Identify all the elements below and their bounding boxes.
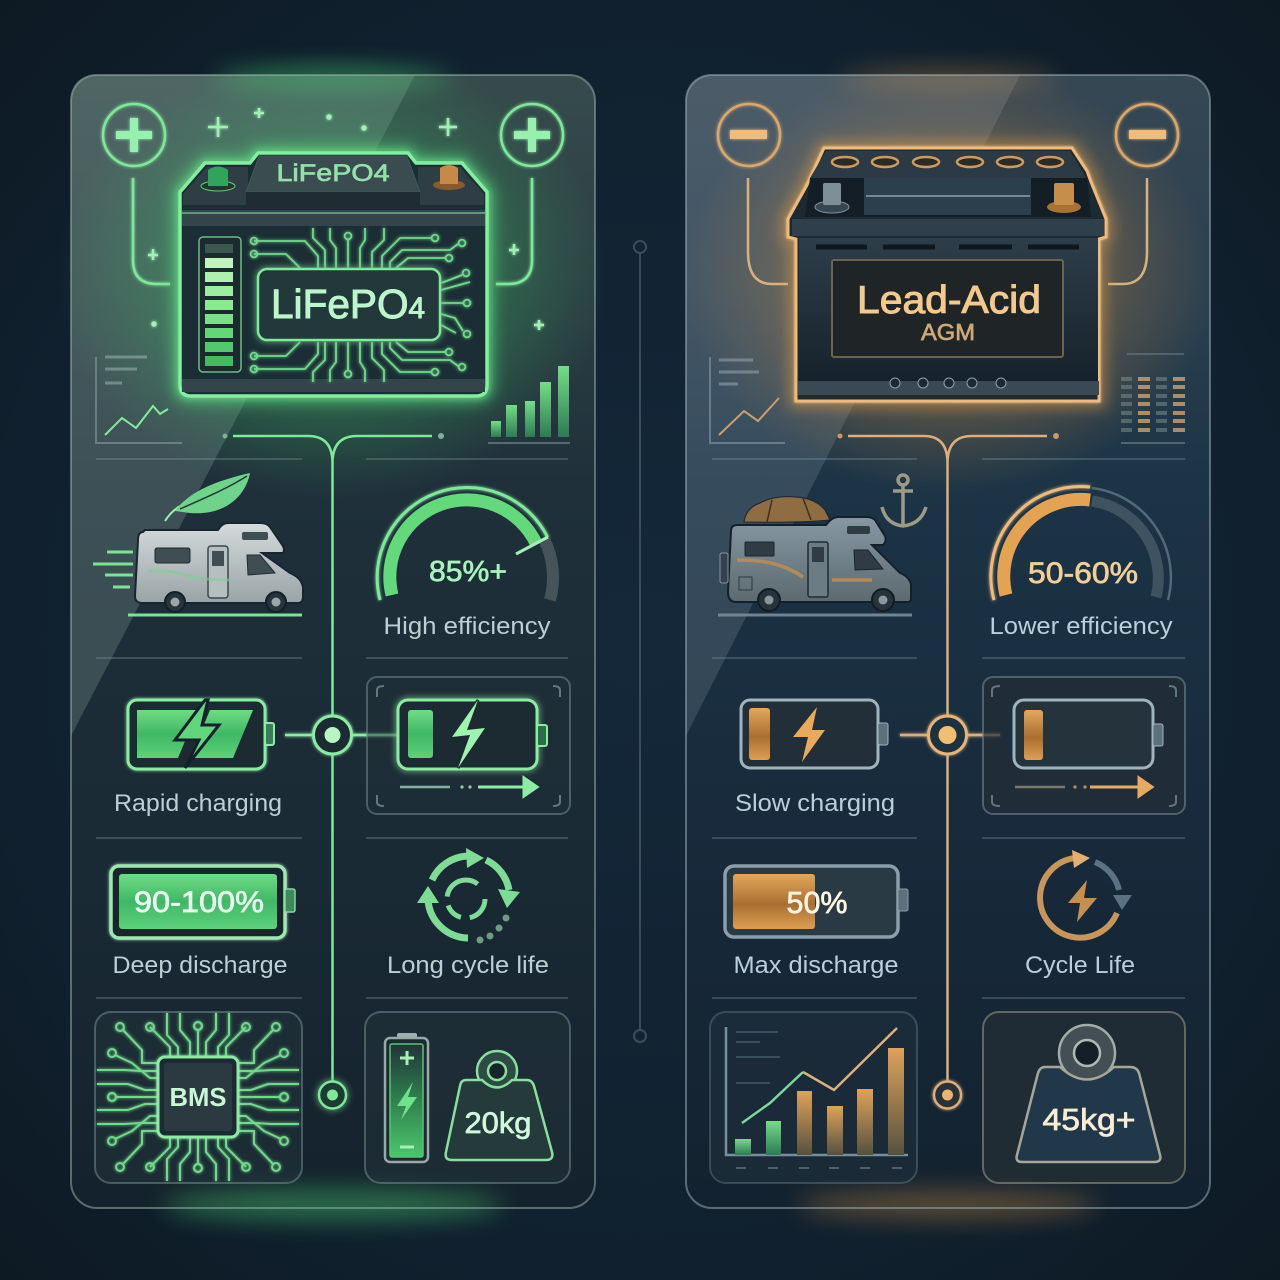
speed lines — [93, 552, 133, 587]
panel: charging battery card — [367, 677, 570, 814]
panel: cost chart — [710, 1012, 917, 1183]
node: spine end — [934, 1082, 961, 1108]
label: rapid charging: Rapid charging — [114, 790, 282, 817]
center divider line — [634, 241, 646, 1042]
icon: long cycle life — [417, 848, 520, 944]
gauge: lower efficiency: 50-60% — [1028, 557, 1138, 590]
terminal: steel — [815, 183, 849, 213]
terminal: copper — [1047, 183, 1081, 213]
node: center connector — [900, 716, 1000, 754]
mini data grid — [1121, 354, 1185, 443]
icon: deep discharge battery — [111, 866, 295, 938]
gauge: high efficiency — [377, 488, 553, 600]
icon: max discharge battery — [725, 866, 908, 937]
gauge value: 85%+ — [429, 556, 507, 588]
terminal: green — [201, 166, 235, 191]
leaf — [165, 473, 250, 521]
panel: BMS chip: BMS — [170, 1082, 226, 1112]
panel: Lead-Acid — [683, 65, 1213, 1219]
label: cycle life: Cycle Life — [1025, 952, 1135, 979]
icon: slow charging battery — [741, 700, 888, 768]
mini line chart — [96, 357, 182, 443]
label: slow charging: Slow charging — [735, 790, 895, 817]
icon: minus circle right — [1116, 104, 1178, 166]
vent slots — [816, 244, 1079, 250]
vent caps — [832, 157, 1063, 167]
bottom band — [798, 378, 1099, 395]
panel: BMS chip — [95, 1012, 302, 1183]
icon: weight — [446, 1051, 552, 1160]
sparkles — [148, 108, 544, 330]
value: 90-100% — [134, 886, 264, 919]
label: max discharge: Max discharge — [734, 952, 898, 979]
label: long cycle life: Long cycle life — [387, 952, 549, 979]
panel: weight 20kg — [365, 1012, 570, 1183]
label on battery lid: LiFePO4 — [276, 160, 390, 187]
gauge: lower efficiency — [991, 487, 1171, 600]
icon: max discharge battery: 50% — [786, 885, 848, 920]
wires to battery — [133, 178, 532, 284]
battery: Lead-Acid — [788, 148, 1106, 401]
van body — [135, 523, 303, 603]
label: high efficiency: High efficiency — [384, 613, 550, 640]
panel: charging battery card — [983, 677, 1185, 814]
battery: LiFePO4 — [180, 153, 487, 396]
icon: camper van with leaf — [93, 473, 303, 615]
label plate: Lead-Acid — [857, 279, 1041, 322]
icon: small cell — [385, 1033, 428, 1162]
panel: weight 45kg: 45kg+ — [1042, 1102, 1136, 1137]
chip label box: LiFePO4 — [271, 281, 425, 327]
terminal: copper — [433, 165, 465, 190]
panel: weight 45kg — [983, 1012, 1185, 1183]
connector: top bracket and spine — [222, 433, 444, 1082]
connector: top bracket and spine — [838, 433, 1059, 1082]
chip label box — [258, 269, 440, 340]
mini bar chart — [488, 366, 570, 443]
icon: weight: 20kg — [464, 1107, 532, 1140]
load — [744, 497, 830, 522]
icon: camper van with anchor and load — [718, 475, 926, 615]
anchor — [882, 475, 926, 526]
label: deep discharge: Deep discharge — [112, 952, 288, 979]
label: lower efficiency: Lower efficiency — [990, 613, 1172, 640]
mini line chart — [710, 357, 785, 443]
icon: minus circle left — [718, 104, 780, 166]
label plate — [832, 260, 1063, 357]
panel: LiFePO4 — [58, 50, 608, 1221]
icon: rapid charging battery — [128, 700, 274, 769]
charge level column — [199, 237, 241, 372]
van body — [728, 517, 911, 602]
label plate: AGM — [921, 319, 975, 345]
circuit traces — [251, 228, 470, 382]
wires to battery — [748, 178, 1147, 284]
icon: cycle life — [1040, 850, 1132, 938]
icon: plus circle left — [103, 104, 165, 166]
node: center connector — [285, 716, 398, 754]
node: spine end — [319, 1082, 346, 1108]
icon: plus circle right — [501, 104, 563, 166]
